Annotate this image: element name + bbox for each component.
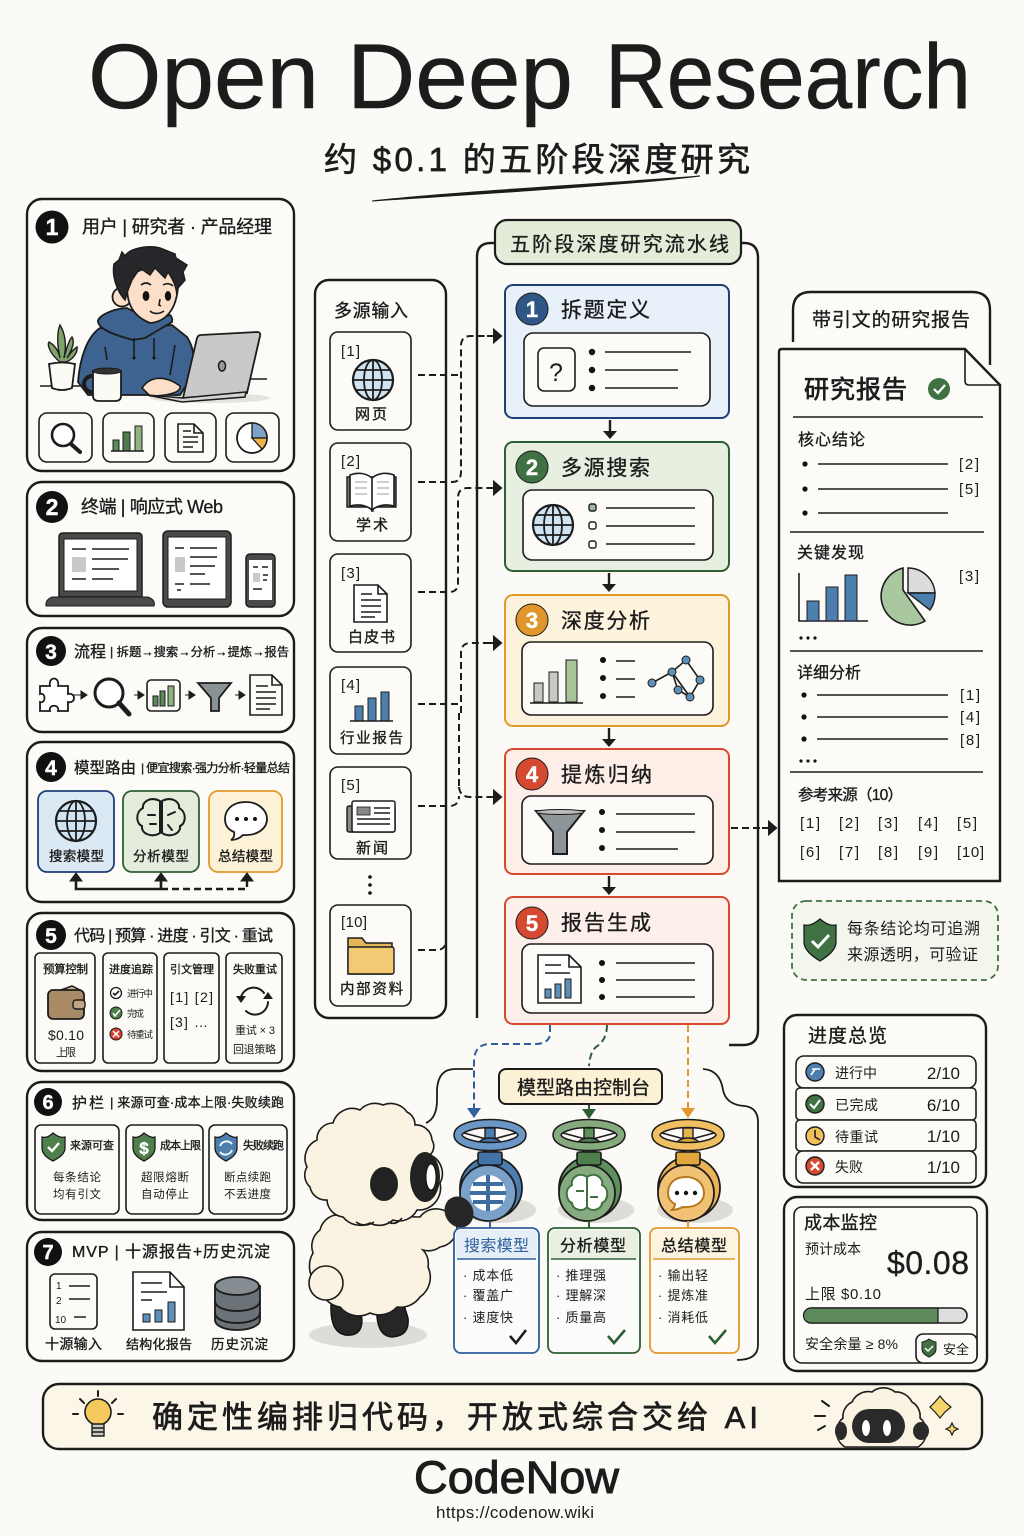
panel: 2 terminals <box>27 482 294 616</box>
panel: multi-source input <box>315 280 446 1018</box>
card: search model specs: · 成本低 <box>463 1268 513 1283</box>
card: summary model specs: · 提炼准 <box>658 1288 708 1303</box>
pipeline heading <box>495 220 741 264</box>
card: summary model <box>209 791 282 872</box>
title: Research <box>605 26 971 128</box>
heading: 成本监控 <box>804 1213 877 1233</box>
section: references: [4] <box>918 815 938 832</box>
dashed connectors: sources to stages <box>418 330 501 950</box>
progress bar <box>804 1308 967 1323</box>
card: summary model specs: · 输出轻 <box>658 1268 708 1283</box>
badge 4 <box>36 752 66 782</box>
card: analysis model specs: · 推理强 <box>556 1268 606 1283</box>
section: conclusions: [2] <box>959 456 979 473</box>
section: references <box>798 786 984 861</box>
badge <box>516 758 548 790</box>
heading: flow: | 拆题→搜索→分析→提炼→报告 <box>110 644 289 659</box>
console heading <box>499 1069 662 1104</box>
icon: ten sources <box>50 1274 97 1329</box>
card: progress: 进行中 <box>127 988 153 1000</box>
phone device <box>246 554 275 607</box>
card: search model <box>38 791 114 872</box>
row: retrying: 待重试 <box>835 1129 878 1145</box>
icon: report <box>250 675 282 715</box>
badge: 2 <box>526 455 538 480</box>
section: details: [4] <box>960 709 980 726</box>
head <box>112 288 132 306</box>
badge <box>516 293 548 325</box>
heading: code: 代码 | 预算 · 进度 · 引文 · 重试 <box>74 926 273 945</box>
illustration: person at laptop <box>40 247 270 403</box>
card: web <box>330 332 411 430</box>
title <box>88 26 971 128</box>
labels <box>45 1336 268 1352</box>
card: academic: 学术 <box>356 517 388 534</box>
section: references: [7] <box>839 844 859 861</box>
brand: CodeNow: CodeNow <box>414 1452 620 1503</box>
heading: routing <box>74 759 290 777</box>
arrow 2-3 <box>602 573 616 592</box>
routing lines from stage 5 <box>467 1025 695 1119</box>
valve: analysis <box>557 1124 634 1228</box>
card: retry: 回退策略 <box>233 1042 276 1056</box>
icon: database <box>215 1277 260 1330</box>
section: details: [1] <box>960 687 980 704</box>
card: search model specs: · 覆盖广 <box>463 1288 513 1303</box>
section: details: [8] <box>960 732 980 749</box>
card: summary model specs: 总结模型 <box>661 1237 727 1255</box>
card: budget: 预算控制 <box>43 962 88 976</box>
badge: 3 <box>526 608 538 633</box>
card: retry: 重试 × 3 <box>235 1023 275 1037</box>
card: citations <box>164 953 219 1063</box>
section: findings: [3] <box>959 568 979 585</box>
section: details <box>797 664 980 763</box>
panel: research report <box>779 349 1000 881</box>
banner text: 确定性编排归代码，开放式综合交给 AI <box>152 1400 758 1435</box>
card: news: [5] <box>341 777 360 794</box>
heading: routing: | 便宜搜索·强力分析·轻量总结 <box>141 760 290 775</box>
badge 7 <box>34 1238 62 1266</box>
stage 3 <box>505 595 729 726</box>
badge 4: 4 <box>45 757 57 780</box>
card: analysis model specs: · 理解深 <box>556 1288 606 1303</box>
row: failed: 1/10 <box>927 1158 960 1177</box>
row: completed: 6/10 <box>927 1096 960 1115</box>
console heading: 模型路由控制台 <box>517 1077 650 1099</box>
arrow <box>185 691 195 699</box>
icon: chart <box>147 680 180 711</box>
badge 3 <box>36 636 66 666</box>
inner card <box>522 796 713 864</box>
badge: 4 <box>526 762 539 787</box>
section: conclusions: [5] <box>959 481 979 498</box>
card: verifiable sources: 来源可查 <box>70 1138 114 1152</box>
heading: 报告生成 <box>561 912 651 935</box>
section: conclusions: 核心结论 <box>798 431 865 449</box>
panel: 5 code <box>27 913 294 1071</box>
valve: summary <box>656 1124 733 1228</box>
arrow: stage 4 to report <box>731 822 776 834</box>
pipeline heading: 五阶段深度研究流水线 <box>510 233 729 256</box>
icon: light bulb <box>73 1391 123 1436</box>
plant <box>48 325 77 362</box>
stage 2 <box>505 442 729 571</box>
heading: 多源搜索 <box>561 457 650 480</box>
card: progress: 待重试 <box>127 1029 153 1041</box>
row: in progress: 2/10 <box>927 1064 960 1083</box>
card: resume on failure: 失败续跑 <box>243 1138 284 1152</box>
heading: flow: 流程 <box>74 643 106 661</box>
section: references: [2] <box>839 815 859 832</box>
heading: 深度分析 <box>561 610 650 633</box>
card: cost cap: 自动停止 <box>141 1187 189 1201</box>
row: in progress <box>796 1056 976 1088</box>
section: details: 详细分析 <box>797 664 861 682</box>
icon: structured report <box>133 1272 184 1330</box>
card: verifiable sources: 均有引文 <box>53 1187 102 1201</box>
inner card <box>522 944 713 1013</box>
panel: 3 flow <box>27 628 294 732</box>
card: citations: [3] … <box>170 1014 208 1030</box>
callout: traceable: 来源透明，可验证 <box>847 946 978 964</box>
card: verifiable sources: 每条结论 <box>53 1170 102 1184</box>
card: summary model: 总结模型 <box>218 849 273 864</box>
card: budget <box>35 953 95 1063</box>
labels: 历史沉淀 <box>211 1337 268 1352</box>
panel: report tab <box>793 292 990 365</box>
badge 7: 7 <box>42 1242 54 1264</box>
arrow 3-4 <box>602 728 616 747</box>
card: news: 新闻 <box>356 840 388 857</box>
card: internal: 内部资料 <box>340 981 403 998</box>
card: internal: [10] <box>341 914 367 931</box>
section: references: 参考来源（10） <box>798 786 903 804</box>
card: budget: 上限 <box>56 1046 76 1059</box>
card: analysis model specs: 分析模型 <box>560 1237 626 1255</box>
card: resume on failure: 不丢进度 <box>224 1187 272 1201</box>
panel: progress overview <box>784 1015 986 1187</box>
valve: search <box>458 1124 536 1228</box>
inner card <box>523 490 713 560</box>
card: cost cap <box>126 1125 203 1214</box>
labels: 结构化报告 <box>126 1337 192 1352</box>
inner card <box>522 642 713 715</box>
card: academic <box>330 443 411 541</box>
card: retry: 失败重试 <box>233 962 277 976</box>
card: verifiable sources <box>35 1125 119 1214</box>
card: web: [1] <box>341 343 360 360</box>
badge <box>516 451 548 483</box>
arrow <box>134 691 144 699</box>
card: budget: $0.10 <box>48 1027 84 1043</box>
callout: traceable <box>792 901 998 980</box>
section: references: [6] <box>800 844 820 861</box>
card: search model specs: 搜索模型 <box>464 1237 529 1255</box>
icon: puzzle <box>40 678 74 711</box>
card: progress: 进度追踪 <box>109 962 153 976</box>
badge 2 <box>36 491 68 523</box>
heading: user: 用户 | 研究者 · 产品经理 <box>82 217 272 237</box>
ellipsis <box>368 875 372 895</box>
panel: cost monitor <box>784 1197 987 1371</box>
badge <box>516 907 548 939</box>
card: cost cap: 超限熔断 <box>141 1170 190 1184</box>
card: analysis model specs <box>548 1228 640 1353</box>
heading: MVP: MVP | 十源报告+历史沉淀 <box>72 1243 270 1261</box>
card: whitepaper <box>330 554 411 652</box>
card: whitepaper: [3] <box>341 565 360 582</box>
arrow <box>235 691 245 699</box>
icon: ten sources: 1 <box>56 1281 62 1292</box>
amount: $0.08 <box>887 1245 969 1281</box>
safe badge <box>916 1334 977 1363</box>
estimate: 预计成本 <box>805 1241 861 1257</box>
heading: sources: 多源输入 <box>334 301 408 321</box>
card: web: 网页 <box>355 406 387 423</box>
section: references: [3] <box>878 815 898 832</box>
badge 5 <box>36 920 66 950</box>
cap: 上限 $0.10 <box>805 1286 881 1303</box>
row: completed: 已完成 <box>835 1097 878 1113</box>
labels: 十源输入 <box>45 1336 102 1352</box>
inner card <box>524 333 710 406</box>
badge <box>516 604 548 636</box>
card: search model specs: · 速度快 <box>463 1310 513 1325</box>
card: news <box>330 767 411 859</box>
row: retrying <box>796 1120 976 1151</box>
arrow <box>74 691 87 699</box>
section: references: [8] <box>878 844 898 861</box>
card: progress <box>103 953 157 1063</box>
icon: mini sheep <box>815 1388 958 1447</box>
stage 5 <box>505 897 729 1024</box>
subtitle <box>324 141 750 201</box>
heading: 进度总览 <box>808 1025 887 1047</box>
heading: 拆题定义 <box>561 299 650 322</box>
hand <box>142 378 180 396</box>
card: industry report: 行业报告 <box>340 730 403 747</box>
panel: 6 guardrails <box>27 1082 294 1220</box>
card: analysis model specs: · 质量高 <box>556 1310 606 1325</box>
card: academic: [2] <box>341 453 360 470</box>
card: progress: 完成 <box>127 1008 144 1020</box>
icon: ten sources: 10 <box>55 1315 67 1326</box>
safe badge: 安全 <box>943 1342 969 1357</box>
safety margin: 安全余量 ≥ 8% <box>805 1336 898 1352</box>
panel: model console outline <box>426 1069 758 1360</box>
card: retry <box>226 953 282 1063</box>
inner card: ? <box>549 359 563 387</box>
card: industry report: [4] <box>341 677 360 694</box>
card: search model specs <box>454 1228 539 1353</box>
badge 5: 5 <box>45 925 57 948</box>
card: industry report <box>330 667 411 754</box>
card: resume on failure: 断点续跑 <box>224 1170 272 1184</box>
card: citations: 引文管理 <box>170 962 214 976</box>
section: findings <box>797 544 979 640</box>
card: summary model specs: · 消耗低 <box>658 1310 708 1325</box>
row: retrying: 1/10 <box>927 1127 960 1146</box>
card: resume on failure <box>209 1125 287 1214</box>
stage 4 <box>505 749 729 874</box>
card: cost cap: 成本上限 <box>160 1138 201 1152</box>
hoodie <box>78 325 194 395</box>
tablet device <box>163 531 231 607</box>
badge 6: 6 <box>42 1092 54 1114</box>
callout: traceable: 每条结论均可追溯 <box>847 920 980 938</box>
panel: pipeline container <box>477 243 758 1045</box>
arrow 4-5 <box>602 876 616 895</box>
badge 1: 1 <box>46 214 59 240</box>
icon row <box>39 413 279 462</box>
card: analysis model <box>123 791 199 872</box>
badge 3: 3 <box>45 641 57 664</box>
title: Open <box>88 26 319 128</box>
laptop <box>183 332 260 398</box>
brand: url: https://codenow.wiki <box>436 1503 594 1522</box>
icon: ten sources: 2 <box>56 1296 62 1307</box>
laptop device <box>46 533 154 606</box>
arrow 1-2 <box>603 420 617 439</box>
heading: flow <box>74 643 289 661</box>
badge: 5 <box>526 911 538 936</box>
mug <box>84 376 92 392</box>
badge 2: 2 <box>46 494 58 520</box>
icon: magnifier <box>95 679 129 714</box>
panel: report tab: 带引文的研究报告 <box>812 309 970 331</box>
section: references: [5] <box>957 815 977 832</box>
panel: 4 model routing <box>27 742 294 902</box>
mascot: sheep <box>305 1103 479 1348</box>
section: conclusions <box>798 431 979 516</box>
report title: 研究报告 <box>804 376 907 404</box>
badge 6 <box>34 1088 62 1116</box>
panel: 7 MVP <box>27 1232 294 1361</box>
card: summary model specs <box>650 1228 739 1353</box>
subtitle: 约 $0.1 的五阶段深度研究 <box>324 141 750 178</box>
heading: routing: 模型路由 <box>74 759 136 777</box>
heading: guardrails: 护栏 <box>72 1095 104 1112</box>
row: completed <box>796 1088 976 1120</box>
badge 1 <box>36 210 68 244</box>
heading: 提炼归纳 <box>561 764 652 787</box>
section: references: [1] <box>800 815 820 832</box>
card: internal <box>330 905 411 1006</box>
section: references: [10] <box>957 844 984 861</box>
row: in progress: 进行中 <box>835 1065 877 1081</box>
row: failed <box>796 1151 976 1183</box>
heading: terminals: 终端 | 响应式 Web <box>81 497 223 517</box>
card: cost cap: $ <box>139 1139 149 1158</box>
stage 1 <box>505 285 729 418</box>
routing arrows <box>70 873 253 889</box>
card: search model: 搜索模型 <box>49 849 104 864</box>
title: Deep <box>347 26 573 128</box>
banner <box>43 1384 982 1449</box>
card: whitepaper: 白皮书 <box>348 629 395 646</box>
section: references: [9] <box>918 844 938 861</box>
icon: funnel <box>198 683 231 711</box>
badge: 1 <box>526 297 538 322</box>
section: findings: 关键发现 <box>797 544 864 562</box>
heading: guardrails: | 来源可查·成本上限·失败续跑 <box>110 1095 284 1110</box>
card: citations: [1] [2] <box>170 989 213 1005</box>
card: analysis model: 分析模型 <box>133 849 189 864</box>
panel: 1 user <box>27 199 294 471</box>
row: failed: 失败 <box>835 1159 863 1175</box>
